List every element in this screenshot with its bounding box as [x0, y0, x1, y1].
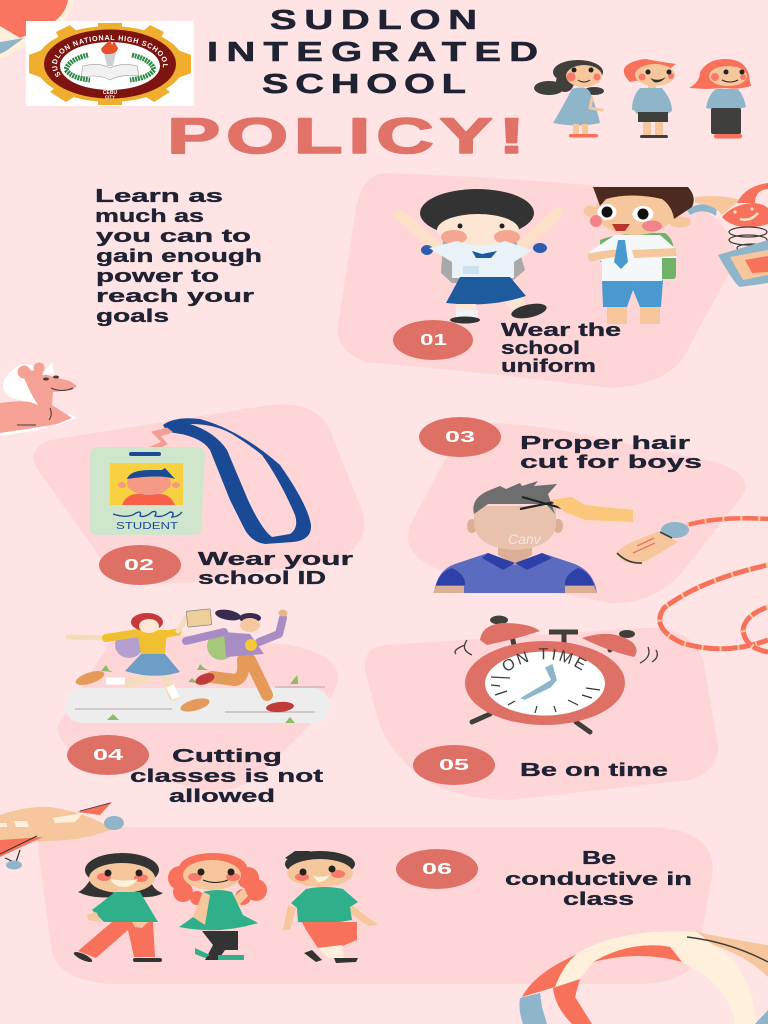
decoration: jump rope	[617, 518, 768, 652]
decoration: unicorn toy	[0, 362, 77, 436]
text: proper hair cut for boys: Proper hair	[520, 432, 690, 453]
text block: motivational message: reach your	[96, 285, 254, 306]
illustration: three happy children	[73, 851, 378, 964]
vibration marks	[455, 640, 657, 663]
panel: policy 01 background	[338, 173, 735, 388]
text block: motivational message: goals	[96, 305, 169, 326]
text: proper hair cut for boys: cut for boys	[520, 451, 702, 472]
text: wear the school uniform: school	[501, 337, 580, 358]
illustration: boy and girl in school uniform	[400, 187, 694, 324]
badge: number 03: 03	[445, 429, 476, 446]
clock bells	[480, 623, 540, 645]
clock face	[485, 652, 605, 716]
badge: number 01	[393, 320, 473, 360]
logo: Sudlon National High School: CITY	[105, 94, 115, 100]
badge: number 02	[99, 545, 181, 585]
child: boy in green shirt	[283, 851, 378, 963]
id photo	[110, 463, 183, 505]
text block: motivational message: power to	[96, 265, 219, 286]
badge: number 01: 01	[420, 332, 448, 349]
text: cutting classes is not allowed	[130, 745, 323, 806]
text: wear the school uniform	[501, 319, 621, 376]
text block: motivational message	[95, 185, 262, 326]
rope handle	[617, 531, 678, 563]
title: school name	[207, 5, 538, 99]
ground	[65, 688, 330, 723]
text: be conductive in class: class	[563, 888, 634, 909]
panel: policy 05 background	[365, 628, 718, 800]
scissors	[520, 497, 565, 509]
illustration: student ID with lanyard	[90, 418, 311, 544]
child: girl in blue dress	[534, 60, 604, 138]
logo: Sudlon National High School	[26, 21, 194, 106]
text: cutting classes is not allowed: Cutting	[172, 745, 282, 766]
title: school name: SUDLON	[270, 5, 477, 35]
illustration: student ID with lanyard: STUDENT	[116, 520, 179, 532]
panel: policy 02 background	[34, 404, 364, 583]
badge: number 03	[419, 417, 501, 457]
clock hands	[522, 665, 556, 699]
logo laurels	[66, 55, 90, 80]
badge: number 06	[396, 849, 478, 889]
rope strands	[660, 518, 768, 652]
text: proper hair cut for boys	[520, 432, 702, 472]
title: school name: SCHOOL	[262, 69, 466, 99]
child: girl in green with coral pants	[73, 853, 163, 964]
lanyard strap	[163, 418, 311, 544]
illustration: on time alarm clock	[454, 616, 658, 734]
badge: number 05: 05	[439, 757, 470, 774]
decoration: smiley toy and spring	[687, 183, 768, 287]
text: cutting classes is not allowed: classes is not	[130, 765, 323, 786]
logo: Sudlon National High School: CEBU	[103, 90, 117, 96]
badge: number 04: 04	[93, 747, 124, 764]
decoration: toy airplane	[0, 802, 124, 870]
child: boy in uniform	[584, 187, 694, 324]
badge: number 06: 06	[422, 861, 453, 878]
child: girl in uniform	[400, 189, 558, 324]
hair	[473, 481, 557, 514]
badge: number 04	[67, 735, 149, 775]
clock stems and feet	[472, 628, 618, 732]
panel: policy 06 background	[38, 827, 713, 984]
running boy	[186, 608, 294, 713]
badge: number 05	[413, 745, 495, 785]
shirt	[434, 553, 597, 593]
illustration: man getting a haircut	[433, 481, 633, 593]
text block: motivational message: you can to	[96, 225, 251, 246]
text block: motivational message: much as	[95, 205, 204, 226]
logo gear	[29, 23, 191, 105]
hand	[550, 497, 633, 522]
panel: policy 03 background	[408, 423, 746, 603]
decoration: top-left toy	[0, 0, 74, 58]
illustration: two students running	[65, 608, 330, 723]
child: girl with coral hair	[689, 59, 751, 138]
clock body	[465, 641, 625, 725]
illustration: on time alarm clock: ON TIME	[502, 648, 587, 670]
text: wear your school ID	[198, 548, 353, 588]
badge: number 02: 02	[124, 557, 154, 574]
logo: Sudlon National High School: SUDLON NATIONAL HIGH SCHOOL	[52, 35, 168, 77]
text: be conductive in class	[505, 847, 692, 909]
child: girl with curly coral hair	[168, 853, 267, 960]
neck	[498, 540, 532, 565]
running girl	[68, 609, 212, 714]
head	[467, 519, 477, 533]
text: be conductive in class: Be	[582, 847, 616, 868]
panel: policy 04 background	[58, 630, 338, 791]
heading: POLICY!: POLICY!	[167, 109, 525, 164]
lanyard clip	[140, 428, 172, 456]
id card	[90, 447, 205, 535]
illustration: three children at top	[534, 59, 751, 138]
text: cutting classes is not allowed: allowed	[169, 785, 275, 806]
text: wear your school ID: school ID	[198, 567, 326, 588]
id scribble	[113, 512, 182, 517]
logo book	[81, 64, 139, 80]
logo torch	[104, 53, 116, 66]
text: wear the school uniform: Wear the	[501, 319, 621, 340]
text block: motivational message: Learn as	[95, 185, 223, 206]
illustration: man getting a haircut: Canv	[508, 531, 542, 547]
title: school name: INTEGRATED	[207, 37, 538, 67]
decoration: hoop rings	[519, 931, 768, 1024]
text: wear the school uniform: uniform	[501, 355, 596, 376]
text: wear your school ID: Wear your	[198, 548, 353, 569]
text: be on time: Be on time	[520, 759, 668, 780]
text block: motivational message: gain enough	[96, 245, 262, 266]
grass tufts	[101, 664, 298, 723]
child: boy in blue shirt	[624, 59, 676, 138]
text: be conductive in class: conductive in	[505, 868, 692, 889]
